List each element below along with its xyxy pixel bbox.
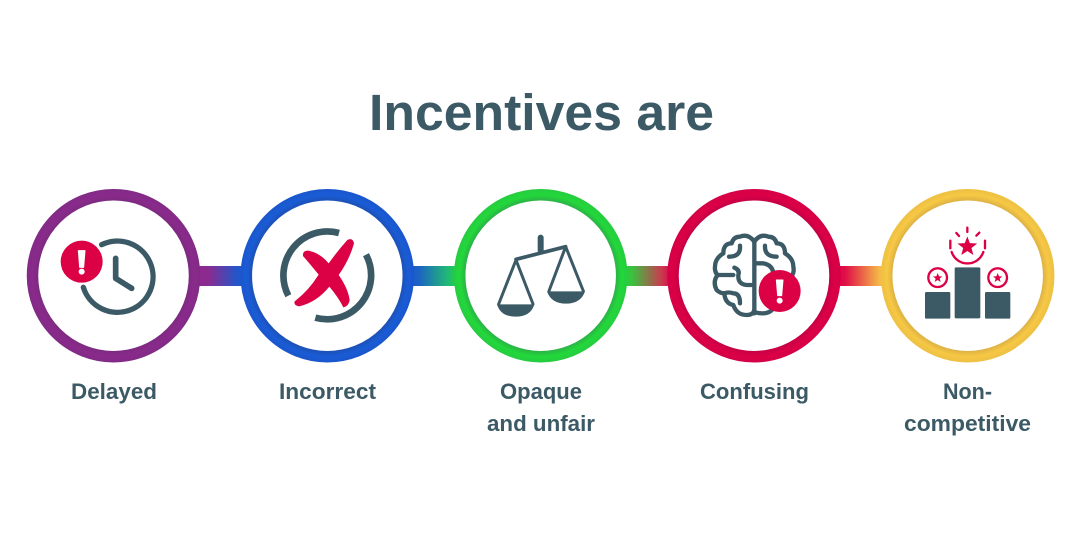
label: incorrect: Incorrect (279, 379, 377, 404)
ring: blue (246, 195, 408, 357)
panel: incorrect (246, 195, 408, 357)
panel: non-competitive (887, 195, 1049, 357)
ring: green (460, 195, 622, 357)
panel: confusing (673, 195, 835, 357)
icon: unbalanced scales (497, 238, 585, 317)
label: opaque and unfair: and unfair (487, 411, 595, 436)
label: opaque and unfair: Opaque (500, 379, 582, 404)
label: non-competitive: Non- (943, 379, 992, 404)
panel: opaque and unfair (460, 195, 622, 357)
connector: green to red (622, 266, 674, 286)
connector: purple to blue (195, 266, 247, 286)
label: opaque and unfair (487, 379, 595, 436)
panel: delayed (32, 195, 194, 357)
icon: crossed circular arrows (283, 231, 371, 319)
ring: purple (32, 195, 194, 357)
label: confusing: Confusing (700, 379, 809, 404)
icon: podium with stars (925, 228, 1010, 319)
connector: blue to green (408, 266, 460, 286)
title: Incentives are (369, 84, 714, 141)
label: delayed: Delayed (71, 379, 157, 404)
connector: red to yellow (835, 266, 887, 286)
label: non-competitive: competitive (904, 411, 1031, 436)
icon: brain with alert (715, 236, 801, 315)
icon: clock with alert (61, 241, 153, 312)
ring: crimson (673, 195, 835, 357)
ring: yellow (887, 195, 1049, 357)
label: non-competitive (904, 379, 1031, 436)
